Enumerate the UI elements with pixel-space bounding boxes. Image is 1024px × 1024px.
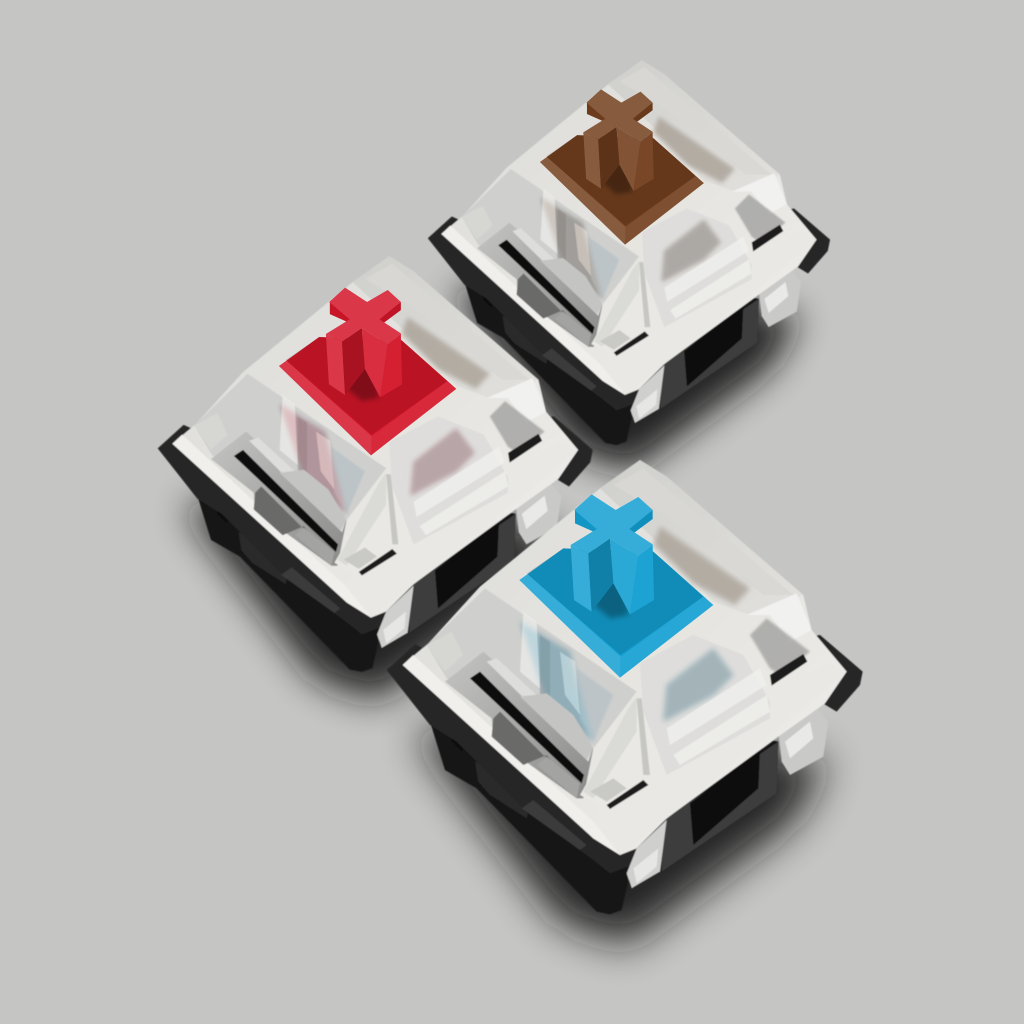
switch: blue xyxy=(387,460,863,945)
switch: brown xyxy=(428,60,830,471)
switch: red xyxy=(158,256,593,700)
